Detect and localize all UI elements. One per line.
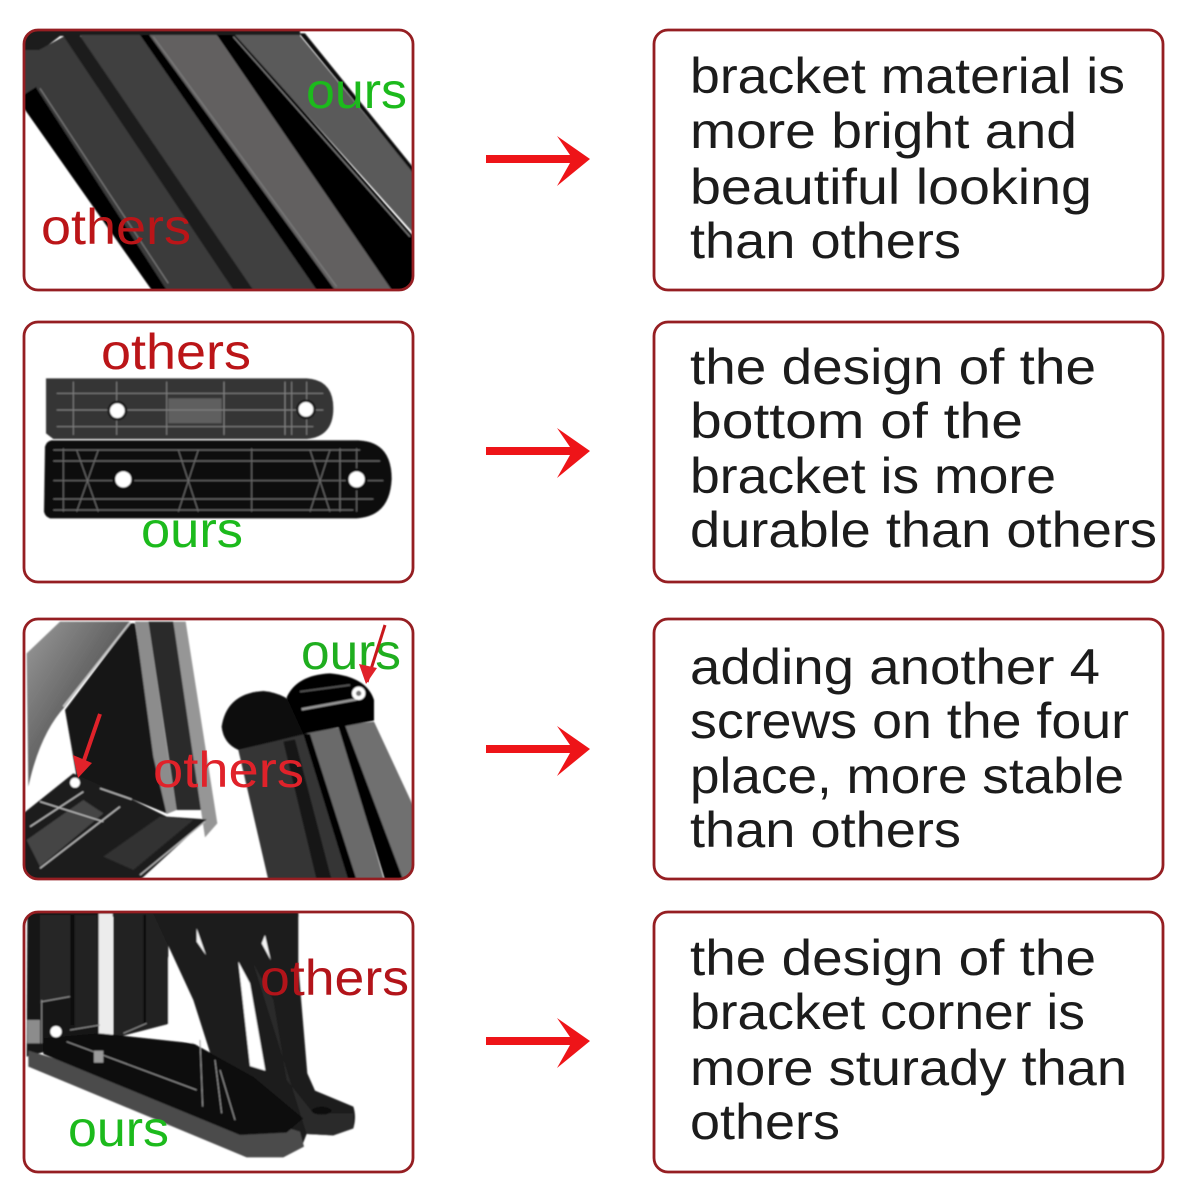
icon: red arrow to our screw [359,625,385,684]
description: bracket corner is [690,984,1085,1040]
description: than others [690,213,961,269]
description: bracket material is [690,48,1125,104]
description: durable than others [690,502,1157,558]
description: bottom of the [690,393,1023,449]
description: the design of the [690,339,1096,395]
description: more sturady than [690,1040,1127,1096]
panel: text box 1 [654,30,1163,290]
description: more bright and [690,103,1077,159]
arrow 1 [486,136,590,186]
photo: bracket bases [44,378,392,518]
label: ours: ours [306,63,407,119]
label: ours: ours [141,502,243,558]
description: the design of the [690,930,1096,986]
panel: bottom design comparison photo [24,322,413,582]
panel frame [24,30,413,290]
arrow 2 [486,428,590,478]
panel: text box 3 [654,619,1163,879]
description: beautiful looking [690,159,1092,215]
label: others: others [101,324,251,380]
description: bracket is more [690,448,1056,504]
label: others: others [41,199,191,255]
panel: material comparison photo [23,27,417,290]
frame [654,322,1163,582]
label: ours: ours [301,624,401,680]
description: place, more stable [690,748,1124,804]
arrow 3 [486,726,590,776]
label: others: others [153,742,304,798]
panel: corner comparison photo [24,912,413,1172]
description: than others [690,802,961,858]
panel: text box 2 [654,322,1163,582]
frame [654,912,1163,1172]
icon: red arrow to their screw [73,714,100,778]
panel: text box 4 [654,912,1163,1172]
frame [654,30,1163,290]
description: others [690,1094,840,1150]
photo: bracket joints [23,622,417,880]
photo: bracket surfaces [23,27,417,290]
panel frame [24,619,413,879]
panel frame [24,322,413,582]
label: ours: ours [68,1101,169,1157]
description: screws on the four [690,693,1129,749]
frame [654,619,1163,879]
panel frame [24,912,413,1172]
label: others: others [260,950,409,1006]
arrow 4 [486,1018,590,1068]
panel: screws comparison photo [23,619,417,880]
photo: bracket corners [27,912,355,1157]
description: adding another 4 [690,639,1100,695]
